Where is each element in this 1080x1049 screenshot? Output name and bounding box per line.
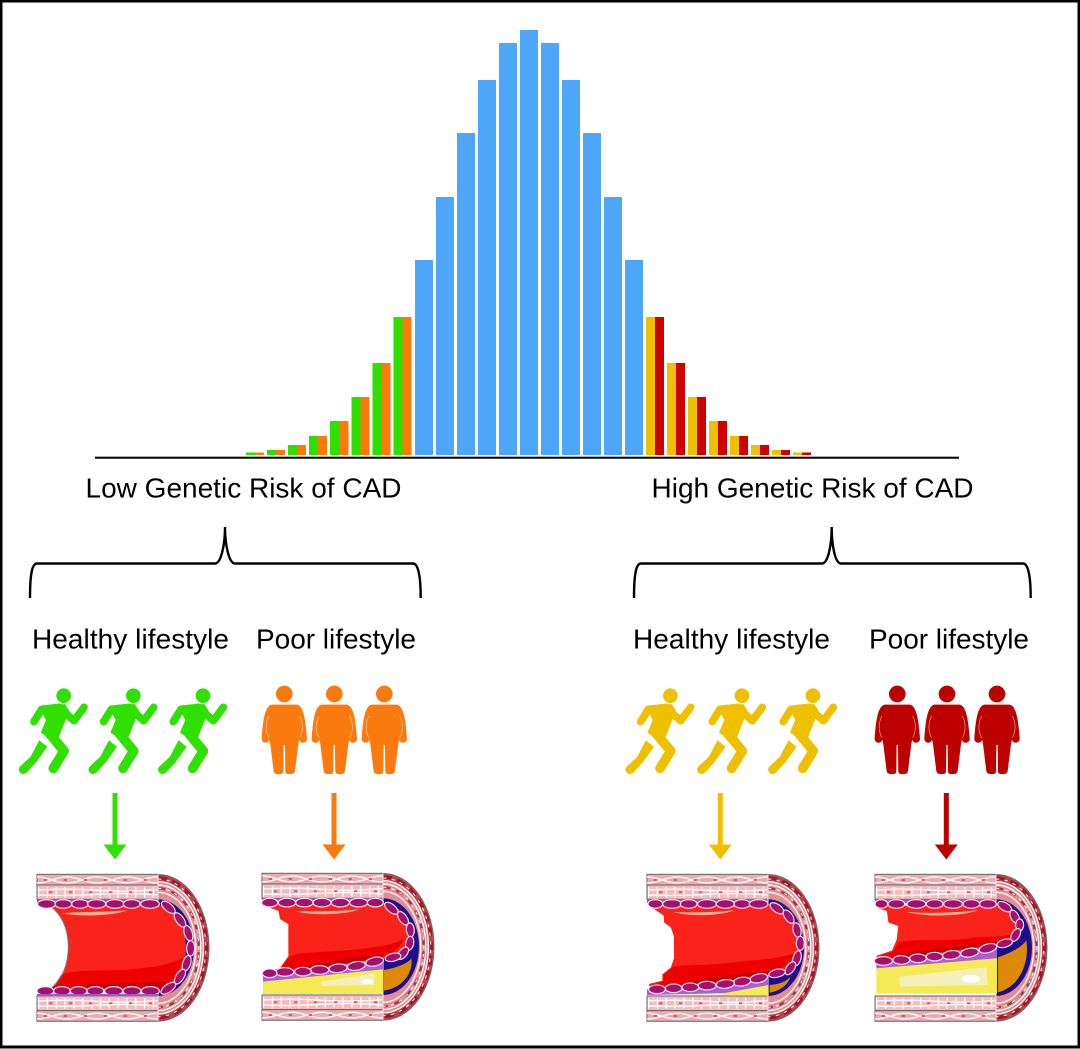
darker blood band bbox=[50, 958, 184, 989]
darker blood band bbox=[270, 939, 404, 973]
artery: poor lifestyle, high risk bbox=[874, 874, 1047, 1021]
icon: yellow runners bbox=[626, 688, 833, 774]
icon: green runners bbox=[19, 688, 223, 774]
high-risk tail bars: healthy (yellow) and poor (red) bbox=[646, 317, 811, 455]
brace: high risk bbox=[634, 527, 1031, 598]
heading: low genetic risk: Low Genetic Risk of CAD bbox=[86, 472, 402, 503]
label: healthy lifestyle, low risk: Healthy lifestyle bbox=[32, 623, 229, 654]
darker blood band bbox=[878, 933, 1017, 961]
lumen bbox=[650, 905, 800, 989]
icon: orange overweight people bbox=[262, 686, 407, 774]
bar chart: genetic risk distribution bbox=[95, 30, 959, 459]
highlight bbox=[907, 910, 978, 916]
arrow: red bbox=[935, 793, 958, 860]
endothelial cells bbox=[648, 900, 804, 994]
heading: high genetic risk: High Genetic Risk of CAD bbox=[652, 472, 974, 503]
endothelial cells bbox=[37, 899, 195, 997]
arrow: green bbox=[104, 793, 126, 860]
orange core in dome bbox=[384, 958, 412, 991]
plaque: intima bbox=[263, 956, 383, 983]
arrow: yellow bbox=[709, 793, 732, 860]
endothelial cells bbox=[262, 898, 415, 978]
label: poor lifestyle, low risk: Poor lifestyle bbox=[256, 623, 416, 654]
plaque: lipid core bbox=[724, 985, 769, 995]
label: healthy lifestyle, high risk: Healthy lifestyle bbox=[633, 623, 830, 654]
low-risk tail bars: healthy (green) and poor (orange) bbox=[246, 317, 412, 455]
chart baseline bbox=[95, 457, 959, 459]
arrow: orange bbox=[322, 793, 346, 860]
artery: poor lifestyle, low risk bbox=[262, 873, 434, 1020]
darker blood band bbox=[650, 953, 795, 989]
endothelial cells bbox=[874, 899, 1024, 965]
lower intima bbox=[37, 994, 158, 996]
lumen bbox=[267, 904, 410, 973]
plaque: intima bbox=[647, 973, 768, 995]
highlight bbox=[62, 910, 128, 915]
lumen bbox=[878, 905, 1020, 961]
highlight bbox=[294, 909, 360, 914]
orange core in dome bbox=[998, 940, 1027, 992]
icon: red overweight people bbox=[875, 686, 1020, 774]
brace: low risk bbox=[30, 527, 421, 598]
highlight bbox=[674, 910, 734, 915]
label: poor lifestyle, high risk: Poor lifestyle bbox=[869, 623, 1029, 654]
plaque: intima bbox=[876, 943, 997, 970]
orange core in dome bbox=[770, 977, 790, 993]
artery: healthy, low risk bbox=[37, 874, 209, 1021]
artery: healthy lifestyle, high risk bbox=[647, 874, 819, 1021]
central blue bars bbox=[415, 30, 643, 455]
lumen bbox=[50, 905, 186, 989]
plaque: lipid core bbox=[263, 969, 383, 994]
plaque: lipid core bbox=[876, 958, 997, 994]
vessel rim bbox=[50, 906, 68, 989]
